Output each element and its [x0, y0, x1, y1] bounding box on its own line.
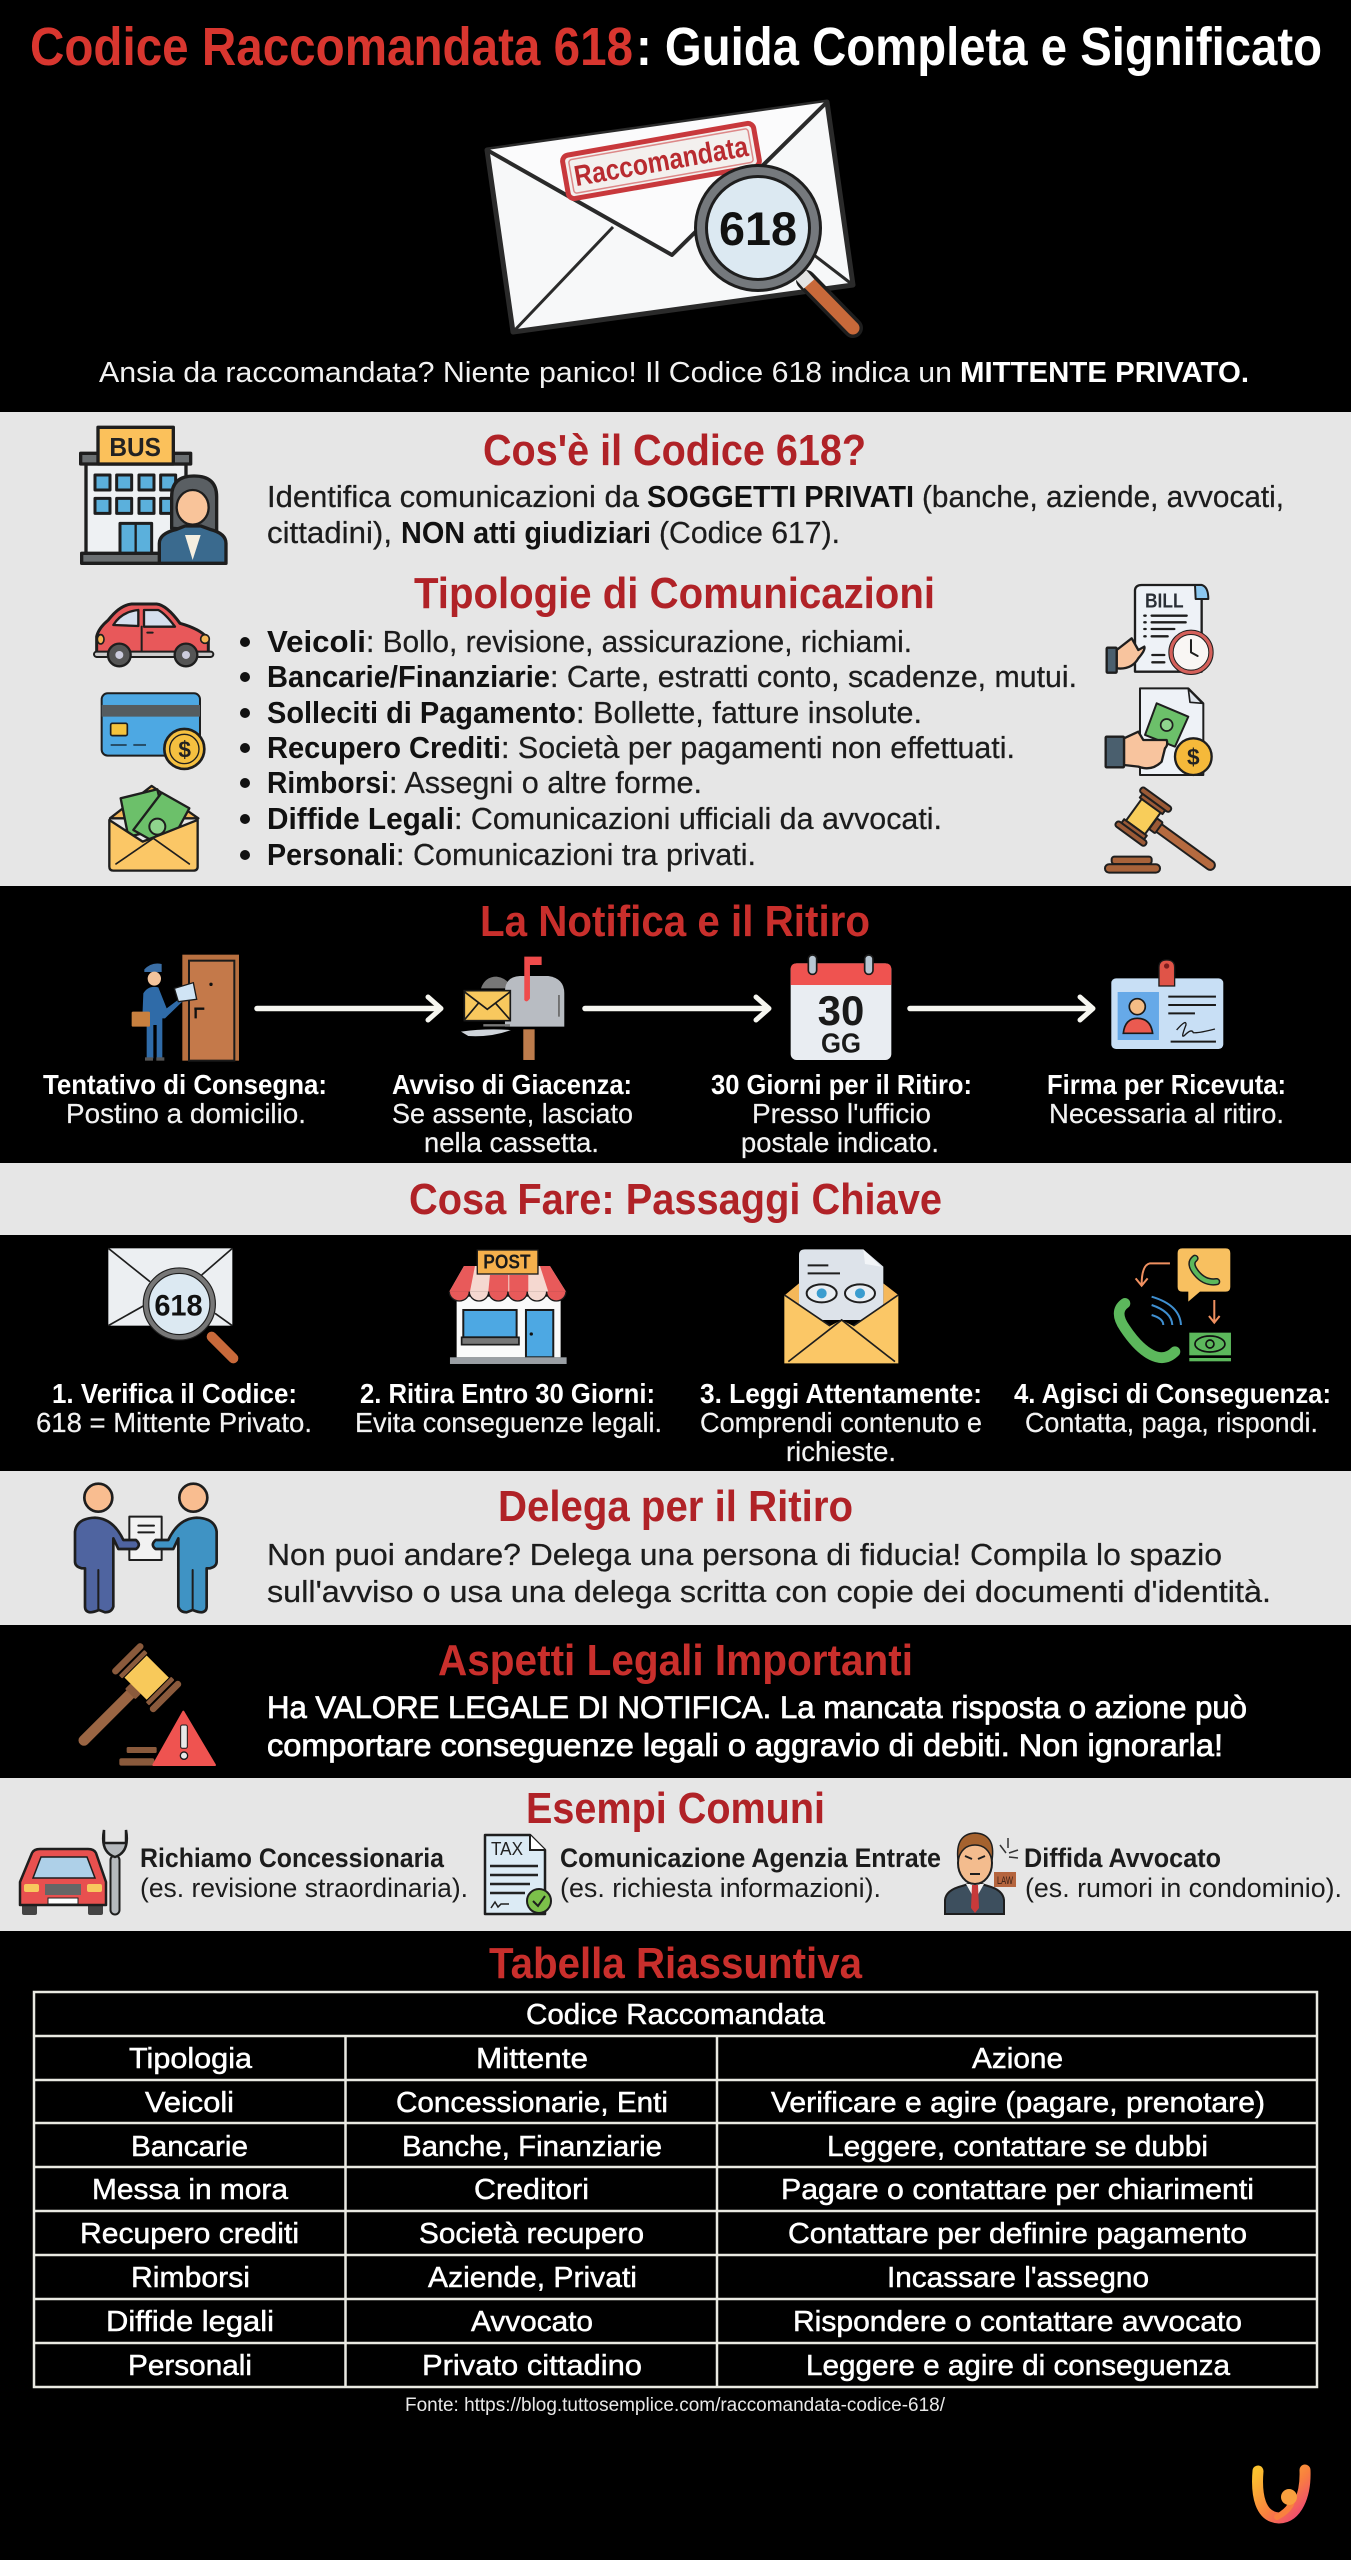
- panel: passaggi chiave: [0, 1235, 1351, 1471]
- caption: 30 giorni per il ritiro: Presso l'ufficio: [752, 1098, 931, 1129]
- icon: building and person: BUS: [109, 432, 161, 462]
- table: riepilogo: Incassare l'assegno: [887, 2262, 1149, 2294]
- table: riepilogo: Leggere, contattare se dubbi: [827, 2131, 1208, 2163]
- table: riepilogo: Messa in mora: [92, 2174, 289, 2206]
- panel: la notifica e il ritiro: [0, 886, 1351, 1163]
- panel: delega per il ritiro: [0, 1471, 1351, 1625]
- text: definizione: NON atti giudiziari: [401, 515, 651, 550]
- caption: agisci di conseguenza: 4. Agisci di Conseguenza:: [1014, 1378, 1331, 1409]
- caption: tentativo di consegna: Postino a domicilio.: [66, 1098, 306, 1129]
- icon: credit card: [102, 693, 204, 769]
- icon: building and person: [81, 427, 226, 563]
- text: intro line: MITTENTE PRIVATO.: [960, 357, 1249, 389]
- list: tipologie: : Assegni o altre forme.: [389, 765, 702, 800]
- caption: ritira entro 30 giorni: [355, 1378, 662, 1438]
- panel: page header: [0, 0, 1351, 412]
- icon: car and wrench: [20, 1830, 127, 1915]
- table: riepilogo: Leggere e agire di conseguenza: [806, 2350, 1231, 2382]
- icon: envelope with banknotes: [109, 786, 198, 871]
- caption: 30 giorni per il ritiro: [711, 1069, 972, 1158]
- icon: angry lawyer: LAW: [997, 1875, 1013, 1887]
- icon: phone and payment: [1119, 1248, 1231, 1361]
- icon: tax document: TAX: [491, 1839, 523, 1859]
- text: definizione: Identifica comunicazioni da: [267, 479, 640, 514]
- icon: bill with clock: [1107, 585, 1211, 673]
- caption: agisci di conseguenza: [1014, 1378, 1331, 1438]
- text: comunicazione agenzia entrate: [560, 1843, 941, 1903]
- icon: envelope 618 magnifier: [108, 1248, 233, 1358]
- caption: avviso di giacenza: Se assente, lasciato: [392, 1098, 633, 1129]
- caption: firma per ricevuta: Firma per Ricevuta:: [1047, 1069, 1286, 1100]
- heading: La Notifica e il Ritiro: La Notifica e il Ritiro: [480, 898, 870, 946]
- caption: verifica il codice: [36, 1378, 312, 1438]
- title: Codice Raccomandata 618: [30, 17, 633, 77]
- icon: calendar 30 GG: [791, 955, 891, 1060]
- caption: firma per ricevuta: [1047, 1069, 1286, 1129]
- caption: ritira entro 30 giorni: Evita conseguenze legali.: [355, 1407, 662, 1438]
- table: riepilogo: Banche, Finanziarie: [402, 2131, 662, 2163]
- icon: open envelope with eyes: [784, 1249, 898, 1363]
- text: valore legale: Ha VALORE LEGALE DI NOTIFICA. La mancata risposta o azione può: [267, 1689, 1247, 1725]
- table: riepilogo: Tipologia: [129, 2043, 253, 2075]
- table: riepilogo: Pagare o contattare per chiarimenti: [781, 2174, 1254, 2206]
- table: riepilogo: Contattare per definire pagamento: [788, 2218, 1247, 2250]
- icon: envelope 618 magnifier: 618: [154, 1289, 203, 1322]
- icon: logo: [1258, 2470, 1305, 2518]
- heading: Cos'è il Codice 618?: Cos'è il Codice 618?: [483, 427, 866, 475]
- caption: firma per ricevuta: Necessaria al ritiro.: [1049, 1098, 1284, 1129]
- list: tipologie: Bancarie/Finanziarie: [267, 659, 550, 694]
- text: diffida avvocato: Diffida Avvocato: [1024, 1843, 1221, 1873]
- icon: calendar 30 GG: 30: [818, 987, 864, 1034]
- text: definizione: cittadini),: [267, 515, 392, 550]
- caption: 30 giorni per il ritiro: postale indicato.: [741, 1127, 939, 1158]
- panel: cos'è e tipologie: [0, 412, 1351, 887]
- caption: avviso di giacenza: [392, 1069, 633, 1158]
- caption: avviso di giacenza: nella cassetta.: [424, 1127, 599, 1158]
- icon: post office: [449, 1250, 567, 1364]
- list: tipologie: Recupero Crediti: [267, 730, 501, 765]
- list: tipologie: : Comunicazioni ufficiali da avvocati.: [454, 801, 942, 836]
- table: riepilogo: Personali: [128, 2350, 252, 2382]
- list: tipologie: Rimborsi: [267, 765, 389, 800]
- caption: agisci di conseguenza: Contatta, paga, rispondi.: [1025, 1407, 1318, 1438]
- icon: tax document: [485, 1835, 551, 1914]
- icon: id card with signature: [1111, 960, 1223, 1049]
- caption: verifica il codice: 618 = Mittente Privato.: [36, 1407, 312, 1438]
- text: definizione: [267, 479, 1284, 550]
- list: tipologie: : Comunicazioni tra privati.: [396, 837, 756, 872]
- text: delega: sull'avviso o usa una delega scritta con copie dei documenti d'identità.: [267, 1574, 1271, 1609]
- icon: document with money: [1106, 688, 1212, 775]
- heading: Tabella Riassuntiva: Tabella Riassuntiva: [489, 1940, 863, 1988]
- table: riepilogo: Azione: [972, 2043, 1063, 2075]
- table: riepilogo: Codice Raccomandata: [526, 1999, 826, 2031]
- text: diffida avvocato: [1024, 1843, 1342, 1903]
- text: fonte: Fonte: https://blog.tuttosemplice.com/raccomandata-codice-618/: [405, 2395, 946, 2416]
- table: riepilogo: Diffide legali: [106, 2306, 274, 2338]
- text: comunicazione agenzia entrate: (es. richiesta informazioni).: [560, 1873, 881, 1903]
- table: riepilogo: Privato cittadino: [422, 2350, 642, 2382]
- table: riepilogo: Recupero crediti: [80, 2218, 299, 2250]
- table: riepilogo: Verificare e agire (pagare, prenotare): [771, 2087, 1265, 2119]
- table: riepilogo: Società recupero: [419, 2218, 644, 2250]
- caption: verifica il codice: 1. Verifica il Codice:: [52, 1378, 297, 1409]
- text: valore legale: comportare conseguenze legali o aggravio di debiti. Non ignorarla!: [267, 1727, 1223, 1763]
- text: richiamo concessionaria: (es. revisione straordinaria).: [140, 1873, 468, 1903]
- text: valore legale: [267, 1689, 1247, 1763]
- heading: Tipologie di Comunicazioni: Tipologie di Comunicazioni: [414, 570, 935, 618]
- caption: leggi attentamente: [700, 1378, 982, 1467]
- icon: credit card: $: [178, 736, 191, 762]
- text: definizione: (Codice 617).: [659, 515, 840, 550]
- list: tipologie: : Società per pagamenti non effettuati.: [501, 730, 1015, 765]
- table: riepilogo: Aziende, Privati: [428, 2262, 637, 2294]
- caption: ritira entro 30 giorni: 2. Ritira Entro 30 Giorni:: [360, 1378, 655, 1409]
- table: riepilogo: Mittente: [476, 2043, 588, 2075]
- heading: Cosa Fare: Passaggi Chiave: Cosa Fare: Passaggi Chiave: [409, 1176, 942, 1224]
- table: riepilogo: Rispondere o contattare avvocato: [793, 2306, 1242, 2338]
- panel: aspetti legali: [0, 1625, 1351, 1778]
- icon: gavel with warning: [59, 1642, 215, 1766]
- text: richiamo concessionaria: [140, 1843, 468, 1903]
- list: tipologie: Personali: [267, 837, 396, 872]
- caption: leggi attentamente: richieste.: [786, 1436, 896, 1467]
- text: delega: [267, 1537, 1271, 1609]
- heading: Delega per il Ritiro: Delega per il Ritiro: [498, 1483, 853, 1531]
- panel: esempi comuni: [0, 1778, 1351, 1931]
- table: riepilogo: Bancarie: [131, 2131, 248, 2163]
- icon: car: [94, 604, 213, 666]
- caption: tentativo di consegna: Tentativo di Consegna:: [43, 1069, 327, 1100]
- icon: calendar 30 GG: GG: [821, 1027, 861, 1058]
- text: definizione: (banche, aziende, avvocati,: [922, 479, 1284, 514]
- list: tipologie: : Carte, estratti conto, scadenze, mutui.: [550, 659, 1077, 694]
- table: riepilogo: Creditori: [474, 2174, 589, 2206]
- caption: 30 giorni per il ritiro: 30 Giorni per il Ritiro:: [711, 1069, 972, 1100]
- list: tipologie: Veicoli: [267, 624, 366, 659]
- text: delega: Non puoi andare? Delega una persona di fiducia! Compila lo spazio: [267, 1537, 1222, 1572]
- panel: cosa fare heading band: [0, 1163, 1351, 1235]
- icon: post office: POST: [483, 1252, 531, 1274]
- text: definizione: SOGGETTI PRIVATI: [647, 479, 914, 514]
- icon: two people exchanging document: [75, 1484, 217, 1612]
- stamp: Raccomandata: Raccomandata: [572, 131, 751, 193]
- icon: gavel: [1105, 786, 1228, 887]
- text: richiamo concessionaria: Richiamo Concessionaria: [140, 1843, 444, 1873]
- arrow: avviso to 30 giorni: [585, 997, 769, 1020]
- text: diffida avvocato: (es. rumori in condominio).: [1025, 1873, 1342, 1903]
- table: riepilogo: Rimborsi: [131, 2262, 250, 2294]
- caption: leggi attentamente: 3. Leggi Attentamente:: [700, 1378, 982, 1409]
- icon: bill with clock: BILL: [1145, 590, 1184, 613]
- table: riepilogo: [34, 1992, 1317, 2387]
- list: tipologie: : Bollette, fatture insolute.: [576, 695, 922, 730]
- arrow: 30 giorni to firma: [910, 997, 1093, 1020]
- icon: postman at door: [132, 955, 239, 1061]
- text: intro line: Ansia da raccomandata? Niente panico! Il Codice 618 indica un: [99, 357, 952, 389]
- icon: envelope with magnifier: [487, 102, 853, 332]
- list: tipologie: Diffide Legali: [267, 801, 454, 836]
- list: tipologie: Solleciti di Pagamento: [267, 695, 576, 730]
- panel: tabella riassuntiva: [0, 1931, 1351, 2560]
- icon: envelope with magnifier: 618: [719, 202, 797, 255]
- table: riepilogo: Veicoli: [145, 2087, 234, 2119]
- arrow: consegna to avviso: [257, 997, 441, 1020]
- list: tipologie: : Bollo, revisione, assicurazione, richiami.: [366, 624, 912, 659]
- heading: Esempi Comuni: Esempi Comuni: [526, 1785, 825, 1833]
- heading: Aspetti Legali Importanti: Aspetti Legali Importanti: [438, 1637, 913, 1685]
- table: riepilogo: Concessionarie, Enti: [396, 2087, 668, 2119]
- caption: leggi attentamente: Comprendi contenuto e: [700, 1407, 982, 1438]
- title: [30, 17, 1322, 77]
- table: riepilogo: Avvocato: [471, 2306, 593, 2338]
- icon: mailbox: [461, 957, 564, 1060]
- caption: tentativo di consegna: [43, 1069, 327, 1129]
- list: tipologie: [240, 624, 1077, 872]
- icon: document with money: $: [1187, 744, 1200, 770]
- icon: angry lawyer: [945, 1833, 1018, 1914]
- caption: avviso di giacenza: Avviso di Giacenza:: [392, 1069, 632, 1100]
- text: comunicazione agenzia entrate: Comunicazione Agenzia Entrate: [560, 1843, 941, 1873]
